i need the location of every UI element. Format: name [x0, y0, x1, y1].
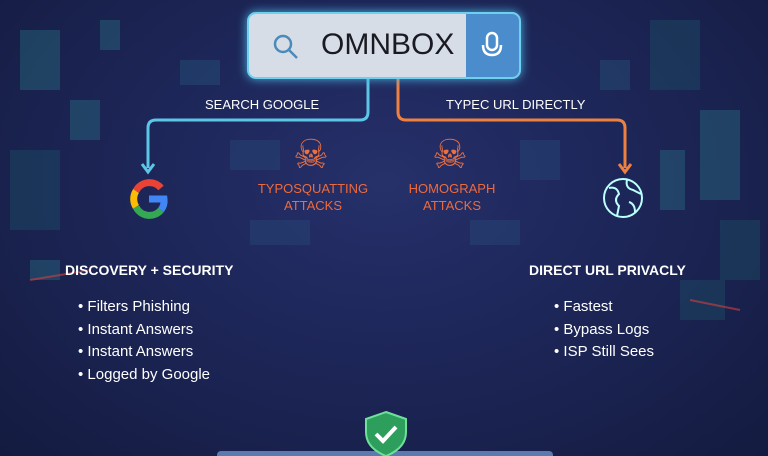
text: homograph: ATTACKS [423, 198, 481, 213]
bullet list: • Instant Answers [78, 343, 193, 360]
omnibox text: OMNBOX [321, 28, 454, 61]
omnibox search bar [247, 12, 521, 79]
text: typosquatting [258, 181, 368, 213]
panel: discovery + security [65, 262, 234, 382]
text: homograph: HOMOGRAPH [409, 181, 495, 196]
bullet list: • Fastest [554, 298, 613, 315]
icon: skull homograph: ☠ [432, 133, 468, 177]
bullet list [554, 298, 654, 360]
text: typosquatting: ATTACKS [284, 198, 342, 213]
heading: DISCOVERY + SECURITY [65, 262, 233, 278]
text: homograph [409, 181, 495, 213]
panel: direct url privacy [529, 262, 686, 360]
icon: magnifier [274, 34, 298, 59]
icon: skull typosquatting: ☠ [293, 133, 329, 177]
label: typed url: TYPEC URL DIRECTLY [446, 97, 585, 112]
bullet list: • Logged by Google [78, 366, 210, 382]
icon: microphone [466, 14, 519, 77]
bullet list: • Filters Phishing [78, 298, 190, 315]
icon: shield check [365, 411, 407, 456]
label: search google: SEARCH GOOGLE [205, 97, 319, 112]
icon: globe [603, 178, 643, 218]
heading: DIRECT URL PRIVACLY [529, 262, 686, 278]
icon: google G [130, 179, 168, 219]
bullet list: • Instant Answers [78, 320, 193, 338]
bullet list: • ISP Still Sees [554, 343, 654, 360]
bullet list: • Bypass Logs [554, 320, 649, 338]
text: typosquatting: TYPOSQUATTING [258, 181, 368, 196]
bottom bar [217, 451, 553, 456]
bullet list [78, 298, 210, 382]
